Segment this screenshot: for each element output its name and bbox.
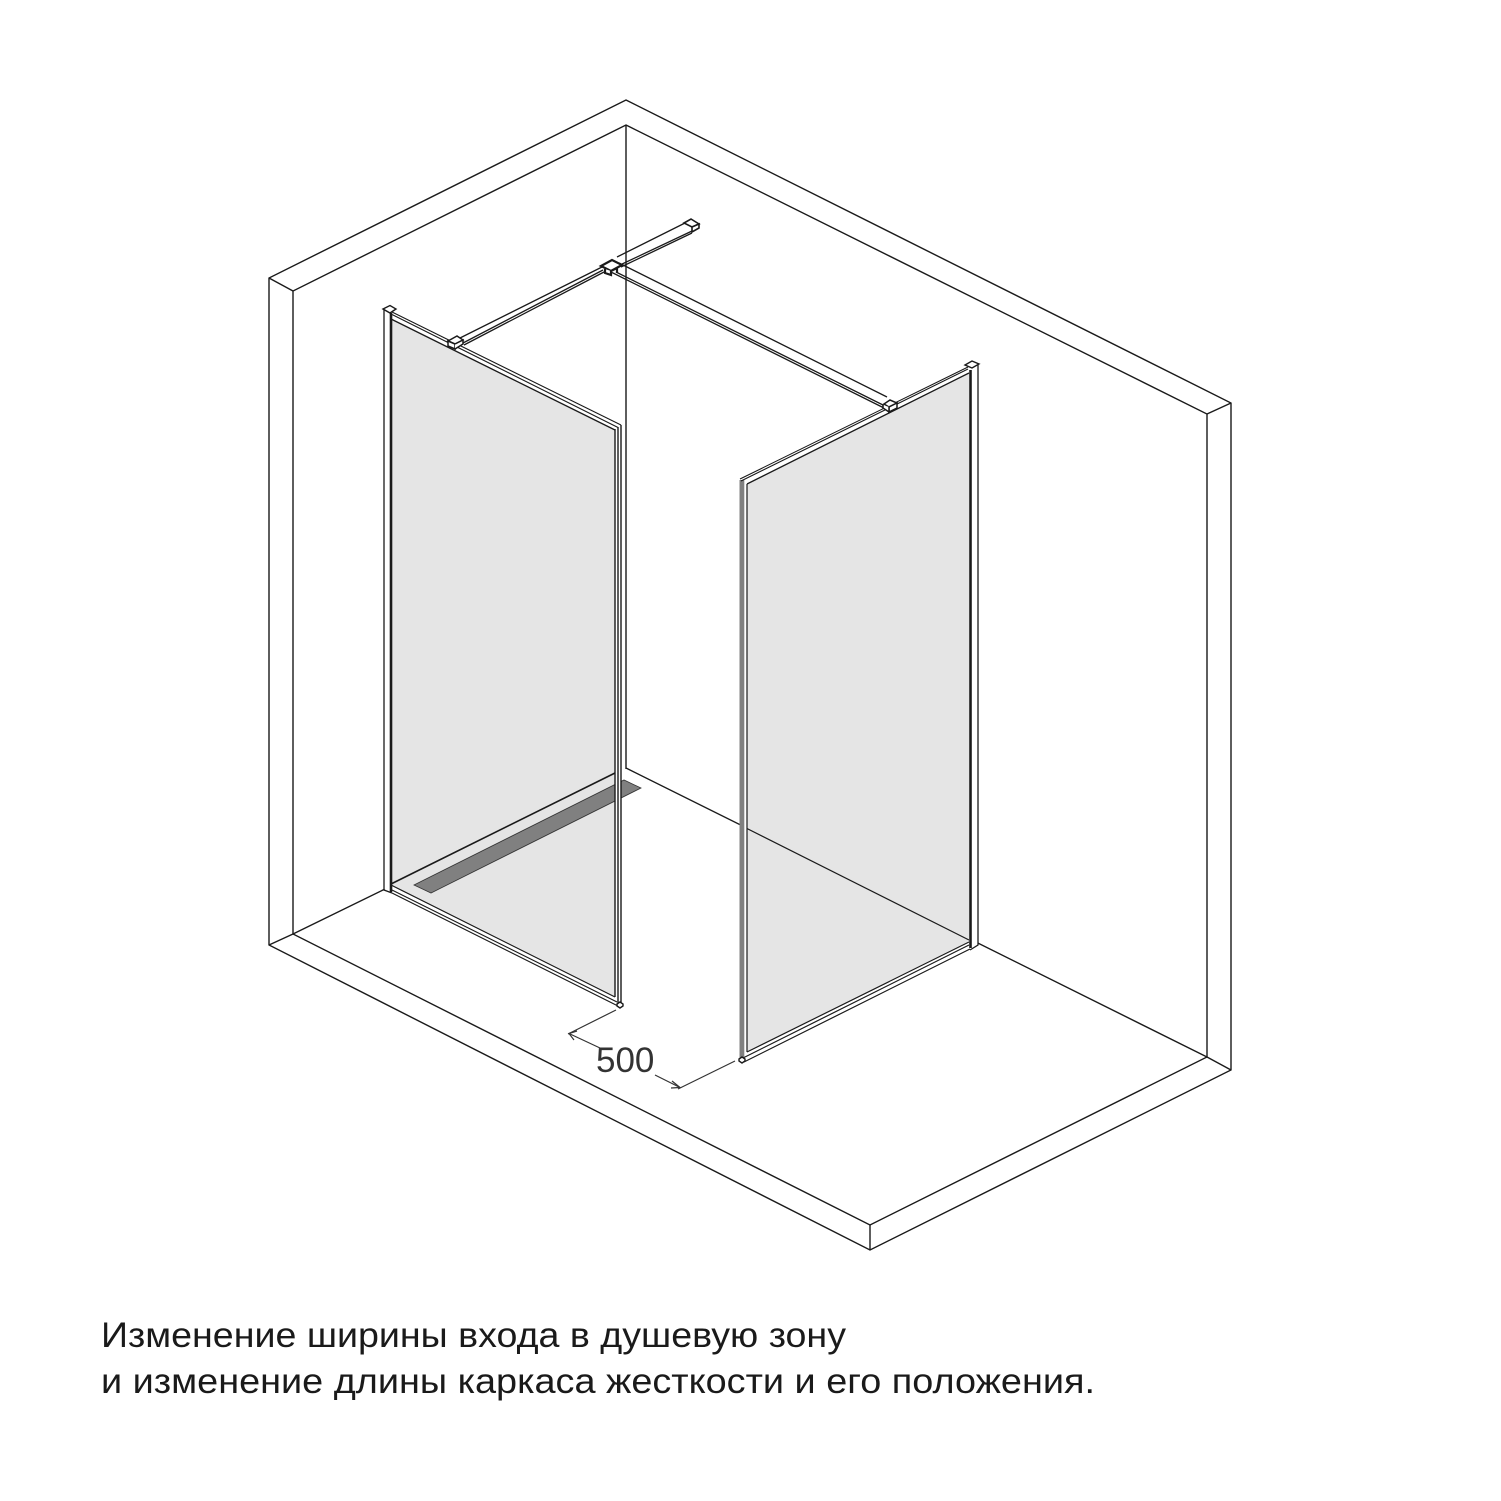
right glass pane (747, 373, 969, 1052)
dimension extension lines and arrows (568, 1010, 735, 1089)
shower floor edge seen through left glass (391, 773, 615, 884)
drain channel (414, 780, 641, 893)
caption line 2: и изменение длины каркаса жесткости и его положения. (101, 1362, 1095, 1401)
room shell: walls and floor outline (269, 100, 1231, 1250)
stiffening frame rails (448, 219, 897, 412)
right glass panel (739, 361, 979, 1063)
caption line 1: Изменение ширины входа в душевую зону (101, 1316, 847, 1355)
left glass pane (391, 319, 615, 997)
dimension value: 500 (596, 1041, 654, 1080)
rail to right panel (612, 263, 887, 408)
dimension arrowheads (569, 1031, 680, 1088)
wall end cap (684, 219, 699, 232)
rail to left panel (460, 267, 604, 345)
rail extension to wall (617, 223, 692, 267)
left panel foot (617, 1002, 623, 1008)
left glass panel (383, 306, 641, 1008)
dimension: entrance width 500 (568, 1010, 735, 1089)
right panel foot (739, 1057, 745, 1063)
right panel frame (740, 365, 978, 1062)
floor line through right glass (740, 825, 969, 940)
left panel clamp (448, 336, 463, 349)
left panel frame (384, 309, 621, 1006)
right panel top cap (965, 361, 979, 368)
caption (101, 1316, 1095, 1401)
right panel clamp (883, 400, 897, 412)
central connector (601, 260, 622, 275)
left panel top cap (383, 306, 396, 313)
